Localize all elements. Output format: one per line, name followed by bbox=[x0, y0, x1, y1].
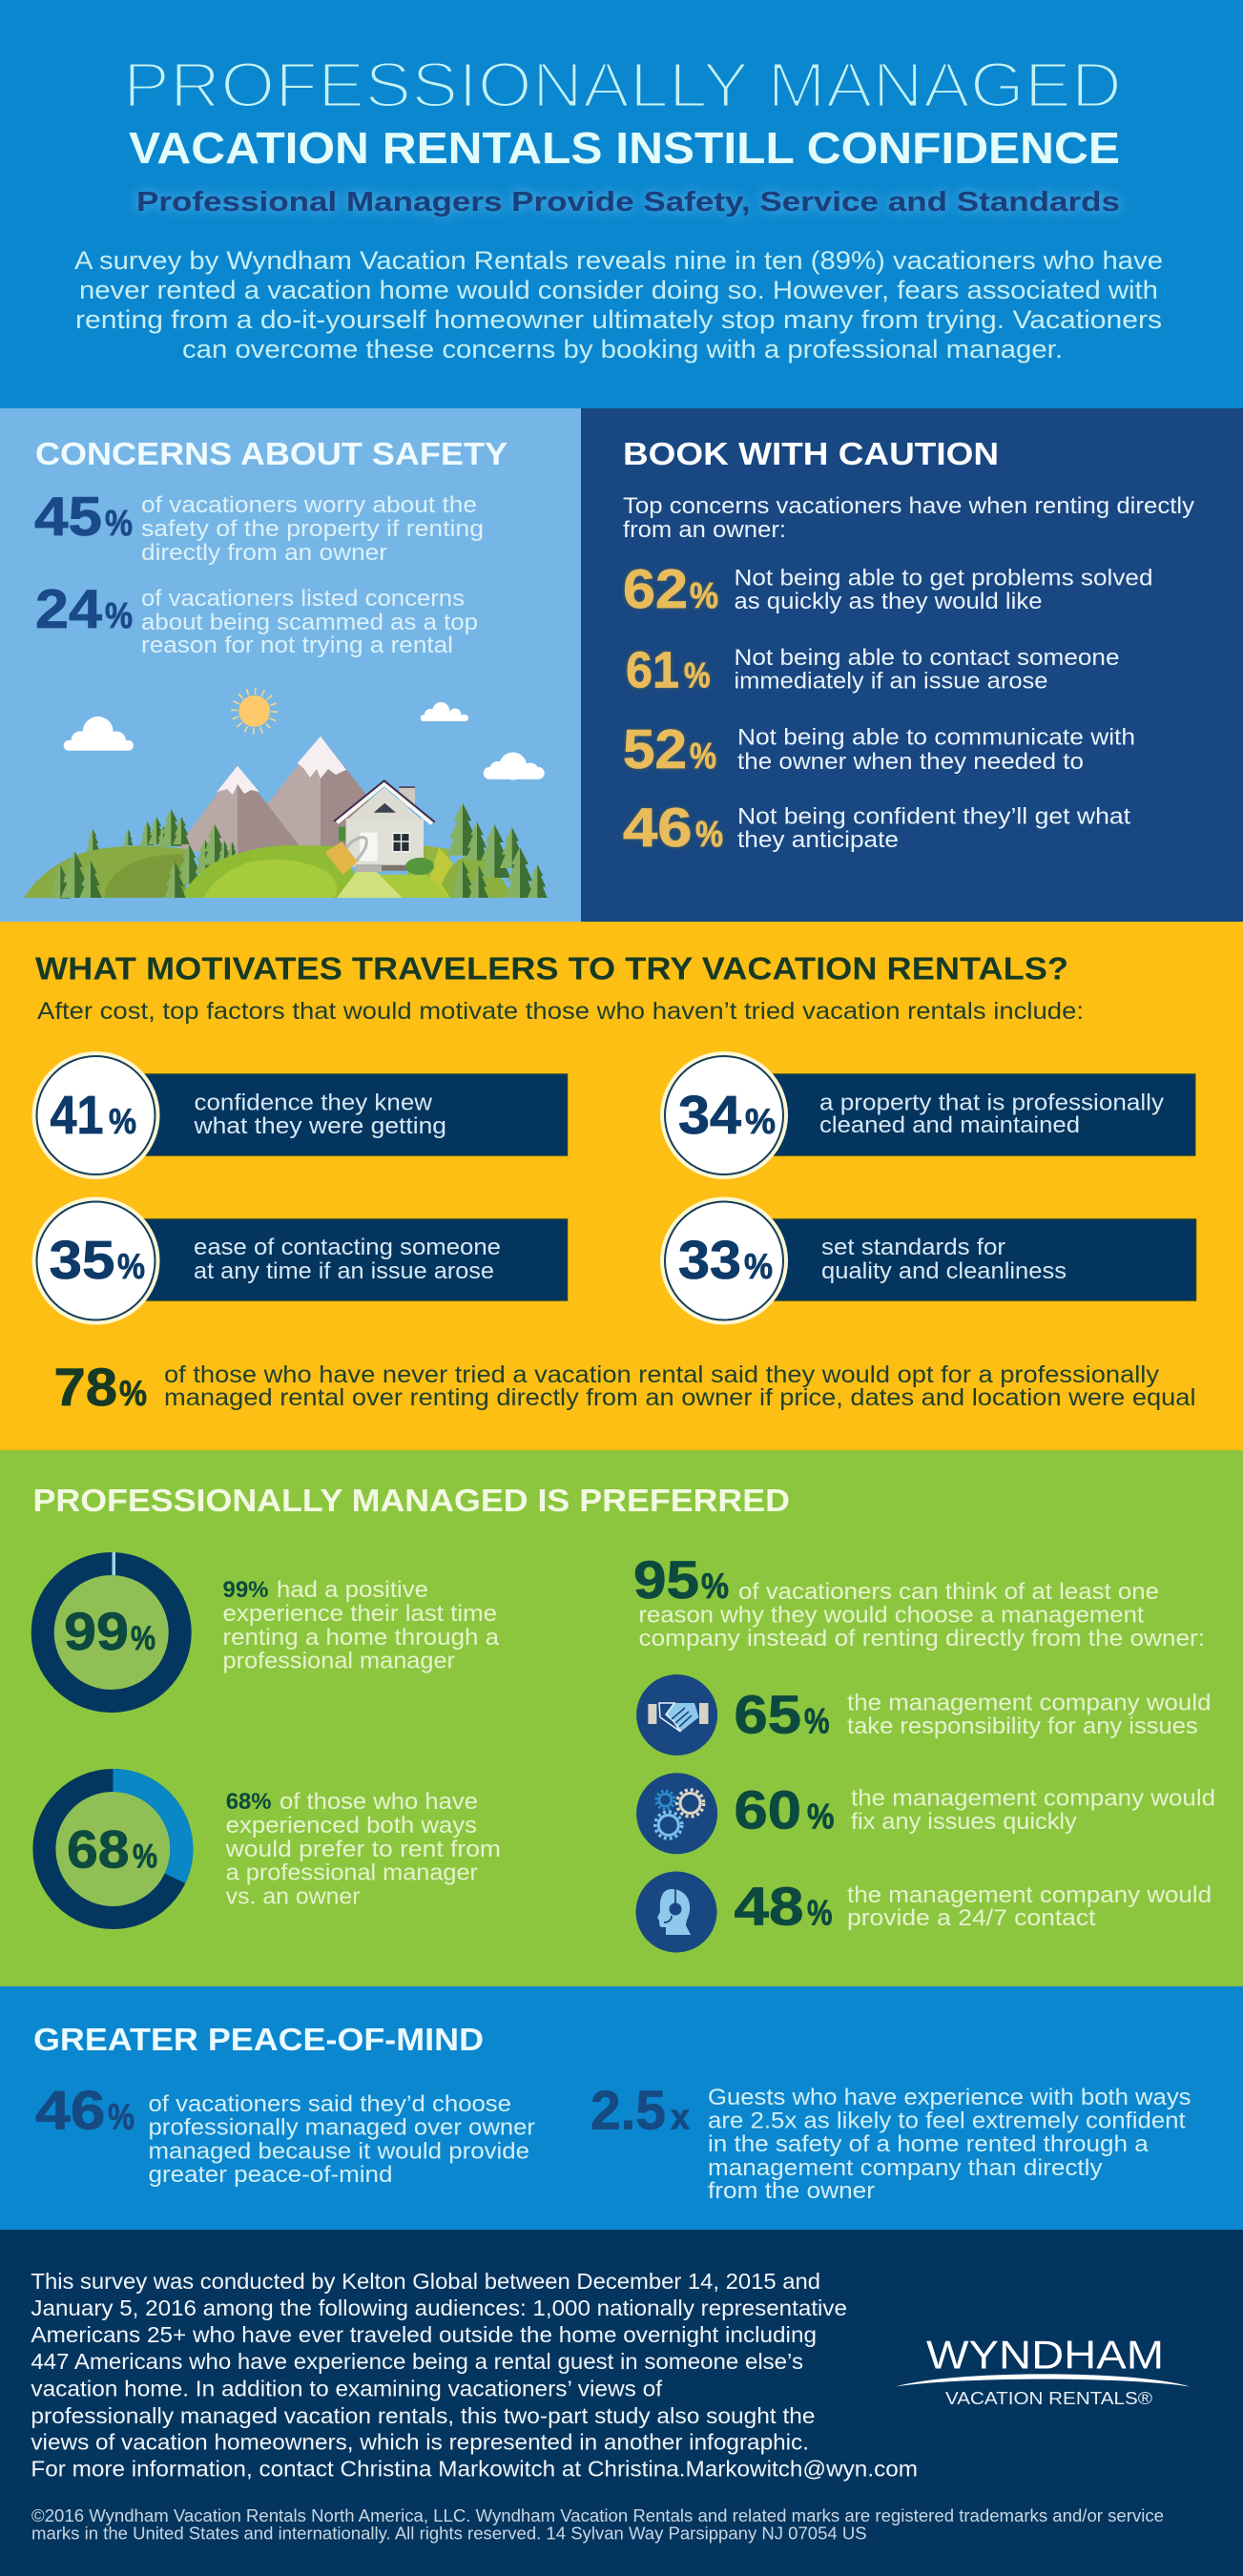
donut chart: 68 percent bbox=[44, 1780, 181, 1918]
text: 68 percent: experienced both ways bbox=[226, 1813, 477, 1839]
stat: 2.5x: are 2.5x as likely to feel extremely confident bbox=[708, 2109, 1186, 2133]
icon: front trees bbox=[51, 803, 548, 899]
donut chart: 99 percent: % bbox=[131, 1620, 155, 1657]
stat: 24 percent bbox=[35, 579, 478, 658]
stat card: 35 percent: at any time if an issue arose bbox=[194, 1258, 494, 1284]
stat: 78 percent: of those who have never tried a vacation rental said they would opt for a professionally bbox=[164, 1361, 1160, 1388]
stat: 65 percent bbox=[735, 1685, 1212, 1746]
stat: 62 percent: as quickly as they would like bbox=[735, 589, 1042, 614]
stat: 62 percent bbox=[623, 559, 1152, 620]
text: top concerns intro bbox=[623, 493, 1194, 543]
stat: 45 percent: % bbox=[105, 504, 133, 544]
icon: head with headset bbox=[635, 1872, 717, 1952]
icon: sun bbox=[235, 691, 275, 731]
stat: 61 percent: immediately if an issue arose bbox=[735, 668, 1047, 695]
stat: 48 percent: % bbox=[807, 1893, 832, 1933]
stat: 2.5x: management company than directly bbox=[708, 2155, 1103, 2181]
stat: 45 percent: of vacationers worry about the bbox=[141, 492, 477, 518]
stat: 60 percent: the management company would bbox=[851, 1786, 1215, 1811]
stat: 45 percent: safety of the property if renting bbox=[141, 516, 484, 542]
text: survey methodology: January 5, 2016 among the following audiences: 1,000 nationally representative bbox=[31, 2296, 847, 2320]
icon: back trees bbox=[86, 809, 190, 851]
stat: 2.5x bbox=[590, 2080, 1191, 2204]
stat: 46 percent: of vacationers said they’d choose bbox=[149, 2091, 511, 2117]
stat: 46 percent: professionally managed over owner bbox=[149, 2114, 535, 2141]
panel: footer bbox=[0, 2230, 1243, 2576]
subtitle: Professional Managers Provide Safety, Service and Standards bbox=[136, 187, 1120, 218]
stat card: 35 percent: ease of contacting someone bbox=[194, 1235, 501, 1260]
text: 99 percent: renting a home through a bbox=[223, 1625, 500, 1651]
stat: 2.5x: Guests who have experience with both ways bbox=[708, 2085, 1191, 2110]
text: survey methodology: 447 Americans who have experience being a rental guest in someone else’s bbox=[31, 2349, 803, 2374]
text: 68 percent: a professional manager bbox=[226, 1860, 478, 1885]
panel: what motivates travelers bbox=[0, 922, 1243, 1450]
stat: 46 percent: greater peace-of-mind bbox=[149, 2162, 393, 2188]
stat: 46 percent: % bbox=[695, 815, 723, 855]
stat card: 33 percent: % bbox=[744, 1247, 773, 1286]
text: 68 percent: of those who have bbox=[280, 1789, 478, 1815]
stat: 95 percent bbox=[633, 1549, 1205, 1652]
stat: 60 percent: fix any issues quickly bbox=[851, 1809, 1077, 1835]
text: survey methodology: professionally managed vacation rentals, this two-part study also sought the bbox=[31, 2403, 815, 2428]
stat: 52 percent: the owner when they needed to bbox=[737, 749, 1084, 775]
text: 99 percent: experience their last time bbox=[223, 1601, 497, 1627]
stat: 52 percent: Not being able to communicate with bbox=[737, 725, 1135, 750]
stat: 2.5x: from the owner bbox=[708, 2178, 875, 2204]
icon: hills bbox=[24, 824, 513, 898]
stat: 52 percent: 52 bbox=[623, 719, 687, 780]
stat card: 33 percent: quality and cleanliness bbox=[821, 1258, 1067, 1284]
donut chart: 68 percent: 68 bbox=[67, 1818, 130, 1880]
text: 99 percent bbox=[223, 1577, 500, 1673]
stat: 48 percent: provide a 24/7 contact bbox=[847, 1905, 1096, 1931]
stat: 24 percent: of vacationers listed concerns bbox=[141, 586, 465, 612]
stat: 95 percent: % bbox=[701, 1567, 729, 1606]
stat: 62 percent: 62 bbox=[623, 559, 688, 620]
stat: 24 percent: 24 bbox=[35, 579, 102, 640]
stat: 48 percent: the management company would bbox=[847, 1882, 1212, 1908]
icon: mountains bbox=[176, 737, 382, 857]
stat: 65 percent: % bbox=[804, 1702, 830, 1740]
intro paragraph: never rented a vacation home would consider doing so. However, fears associated with bbox=[79, 276, 1158, 304]
stat card: 34 percent: % bbox=[745, 1102, 776, 1141]
icon: cloud top right bbox=[421, 702, 468, 721]
donut chart: 68 percent: % bbox=[133, 1838, 157, 1876]
stat card: 41 percent: what they were getting bbox=[193, 1113, 446, 1139]
text: 68 percent bbox=[225, 1789, 501, 1910]
text: copyright: ©2016 Wyndham Vacation Rentals North America, LLC. Wyndham Vacation Rentals and related marks are registered trademarks and/or service bbox=[31, 2506, 1164, 2525]
stat: 95 percent: company instead of renting directly from the owner: bbox=[639, 1626, 1205, 1652]
heading: what motivates travelers: WHAT MOTIVATES TRAVELERS TO TRY VACATION RENTALS? bbox=[35, 950, 1068, 987]
text: survey methodology: This survey was conducted by Kelton Global between December 14, 2015 and bbox=[31, 2269, 820, 2294]
heading: professionally managed is preferred: PROFESSIONALLY MANAGED IS PREFERRED bbox=[32, 1483, 790, 1518]
stat card: 33 percent: 33 bbox=[678, 1230, 741, 1291]
text: survey methodology: Americans 25+ who have ever traveled outside the home overnight including bbox=[31, 2322, 817, 2347]
text: 68 percent: would prefer to rent from bbox=[225, 1837, 501, 1862]
text: survey methodology bbox=[31, 2269, 918, 2481]
icon: cloud right bbox=[484, 752, 545, 780]
text: 99 percent: 99% bbox=[223, 1577, 269, 1603]
stat: 78 percent: % bbox=[119, 1374, 147, 1413]
stat: 65 percent: the management company would bbox=[847, 1691, 1212, 1715]
stat: 60 percent: 60 bbox=[735, 1780, 801, 1841]
stat: 46 percent: they anticipate bbox=[737, 827, 899, 853]
stat card: 35 percent bbox=[32, 1196, 567, 1324]
intro paragraph: A survey by Wyndham Vacation Rentals reveals nine in ten (89%) vacationers who have bbox=[74, 246, 1163, 275]
panel: concerns about safety bbox=[0, 408, 581, 922]
logo: wyndham vacation rentals bbox=[896, 2332, 1190, 2408]
text: copyright bbox=[31, 2506, 1164, 2544]
stat card: 41 percent bbox=[32, 1051, 567, 1179]
text: top concerns intro: Top concerns vacationers have when renting directly bbox=[623, 493, 1194, 519]
logo: wyndham vacation rentals: VACATION RENTALS® bbox=[945, 2389, 1152, 2408]
text: 68 percent: vs. an owner bbox=[226, 1883, 361, 1910]
stat card: 34 percent: a property that is professionally bbox=[819, 1090, 1164, 1116]
stat card: 33 percent: set standards for bbox=[821, 1235, 1005, 1260]
stat: 95 percent: reason why they would choose a management bbox=[639, 1603, 1144, 1628]
text: top concerns intro: from an owner: bbox=[623, 517, 786, 543]
stat: 48 percent bbox=[735, 1876, 1212, 1937]
text: survey methodology: views of vacation homeowners, which is represented in another infographic. bbox=[31, 2429, 809, 2454]
stat: 46 percent: Not being confident they’ll get what bbox=[737, 803, 1130, 830]
stat: 45 percent: directly from an owner bbox=[141, 540, 387, 566]
title: professionally managed: PROFESSIONALLY MANAGED bbox=[123, 50, 1122, 121]
donut chart: 99 percent: 99 bbox=[64, 1601, 129, 1661]
logo: wyndham vacation rentals: WYNDHAM bbox=[926, 2332, 1164, 2378]
donut chart: 99 percent bbox=[43, 1552, 180, 1701]
stat: 78 percent bbox=[53, 1357, 1196, 1417]
icon: cloud left bbox=[64, 717, 134, 751]
icon: handshake bbox=[636, 1674, 717, 1755]
stat: 46 percent bbox=[35, 2080, 535, 2188]
text: 99 percent: professional manager bbox=[223, 1649, 455, 1673]
stat: 45 percent bbox=[34, 487, 484, 566]
stat card: 34 percent: 34 bbox=[678, 1085, 741, 1146]
stat card: 41 percent: 41 bbox=[50, 1085, 103, 1146]
stat: 65 percent: take responsibility for any issues bbox=[847, 1714, 1198, 1739]
text: survey methodology: vacation home. In addition to examining vacationers’ views of bbox=[31, 2376, 663, 2400]
stat: 62 percent: Not being able to get problems solved bbox=[735, 565, 1152, 592]
stat: 46 percent bbox=[623, 798, 1130, 859]
text: copyright: marks in the United States and internationally. All rights reserved. 14 Sylvan Way Parsippany NJ 07054 US bbox=[31, 2524, 867, 2544]
stat: 95 percent: of vacationers can think of at least one bbox=[738, 1579, 1159, 1605]
stat: 52 percent bbox=[623, 719, 1135, 780]
stat: 24 percent: % bbox=[105, 596, 133, 636]
text: survey methodology: For more information, contact Christina Markowitch at Christina.Markowitch@wyn.com bbox=[31, 2456, 918, 2481]
heading: book with caution: BOOK WITH CAUTION bbox=[623, 436, 999, 471]
stat: 48 percent: 48 bbox=[735, 1876, 803, 1937]
stat: 61 percent: % bbox=[684, 656, 710, 695]
stat: 2.5x: x bbox=[671, 2097, 690, 2137]
icon: gears bbox=[636, 1773, 717, 1854]
stat: 62 percent: % bbox=[690, 576, 718, 616]
stat: 45 percent: 45 bbox=[34, 487, 102, 548]
icon: house bbox=[325, 780, 435, 875]
text: after cost intro: After cost, top factors that would motivate those who haven’t tried vacation rentals include: bbox=[37, 998, 1084, 1025]
stat: 65 percent: 65 bbox=[735, 1685, 801, 1746]
stat: 61 percent bbox=[626, 641, 1120, 698]
stat card: 33 percent bbox=[660, 1196, 1196, 1324]
stat: 95 percent: 95 bbox=[633, 1549, 699, 1610]
stat: 61 percent: 61 bbox=[626, 641, 679, 698]
stat: 52 percent: % bbox=[690, 737, 716, 777]
stat: 2.5x: 2.5 bbox=[590, 2080, 666, 2141]
text: 68 percent: 68% bbox=[226, 1789, 271, 1815]
illustration: house in the mountains bbox=[24, 691, 548, 899]
stat card: 34 percent: cleaned and maintained bbox=[819, 1112, 1080, 1138]
stat: 78 percent: managed rental over renting directly from an owner if price, dates and location were equal bbox=[164, 1384, 1196, 1411]
stat card: 35 percent: % bbox=[117, 1247, 145, 1286]
panel: greater peace-of-mind bbox=[0, 1986, 1243, 2230]
stat: 60 percent bbox=[735, 1780, 1215, 1841]
panel: professionally managed is preferred bbox=[0, 1450, 1243, 1986]
text: 99 percent: had a positive bbox=[277, 1577, 428, 1603]
intro paragraph bbox=[74, 246, 1163, 364]
stat: 46 percent: 46 bbox=[35, 2080, 105, 2141]
stat: 24 percent: about being scammed as a top bbox=[141, 610, 478, 635]
title: vacation rentals instill confidence: VACATION RENTALS INSTILL CONFIDENCE bbox=[129, 123, 1120, 173]
heading: concerns about safety: CONCERNS ABOUT SAFETY bbox=[35, 436, 508, 471]
stat: 46 percent: managed because it would provide bbox=[149, 2139, 529, 2164]
stat: 2.5x: in the safety of a home rented through a bbox=[708, 2131, 1149, 2157]
stat card: 41 percent: % bbox=[109, 1102, 136, 1141]
stat: 46 percent: % bbox=[108, 2097, 135, 2137]
stat: 60 percent: % bbox=[807, 1797, 834, 1836]
stat: 24 percent: reason for not trying a rental bbox=[141, 633, 453, 658]
stat: 78 percent: 78 bbox=[53, 1357, 117, 1417]
intro paragraph: renting from a do-it-yourself homeowner ultimately stop many from trying. Vacationers bbox=[75, 305, 1162, 334]
heading: greater peace-of-mind: GREATER PEACE-OF-MIND bbox=[33, 2022, 484, 2057]
stat card: 34 percent bbox=[660, 1051, 1195, 1179]
panel: book with caution bbox=[581, 408, 1243, 922]
panel: header bbox=[0, 0, 1243, 408]
stat: 46 percent: 46 bbox=[623, 798, 693, 859]
stat card: 41 percent: confidence they knew bbox=[195, 1090, 433, 1116]
intro paragraph: can overcome these concerns by booking with a professional manager. bbox=[182, 335, 1063, 364]
stat: 61 percent: Not being able to contact someone bbox=[735, 645, 1120, 671]
stat card: 35 percent: 35 bbox=[50, 1230, 114, 1291]
